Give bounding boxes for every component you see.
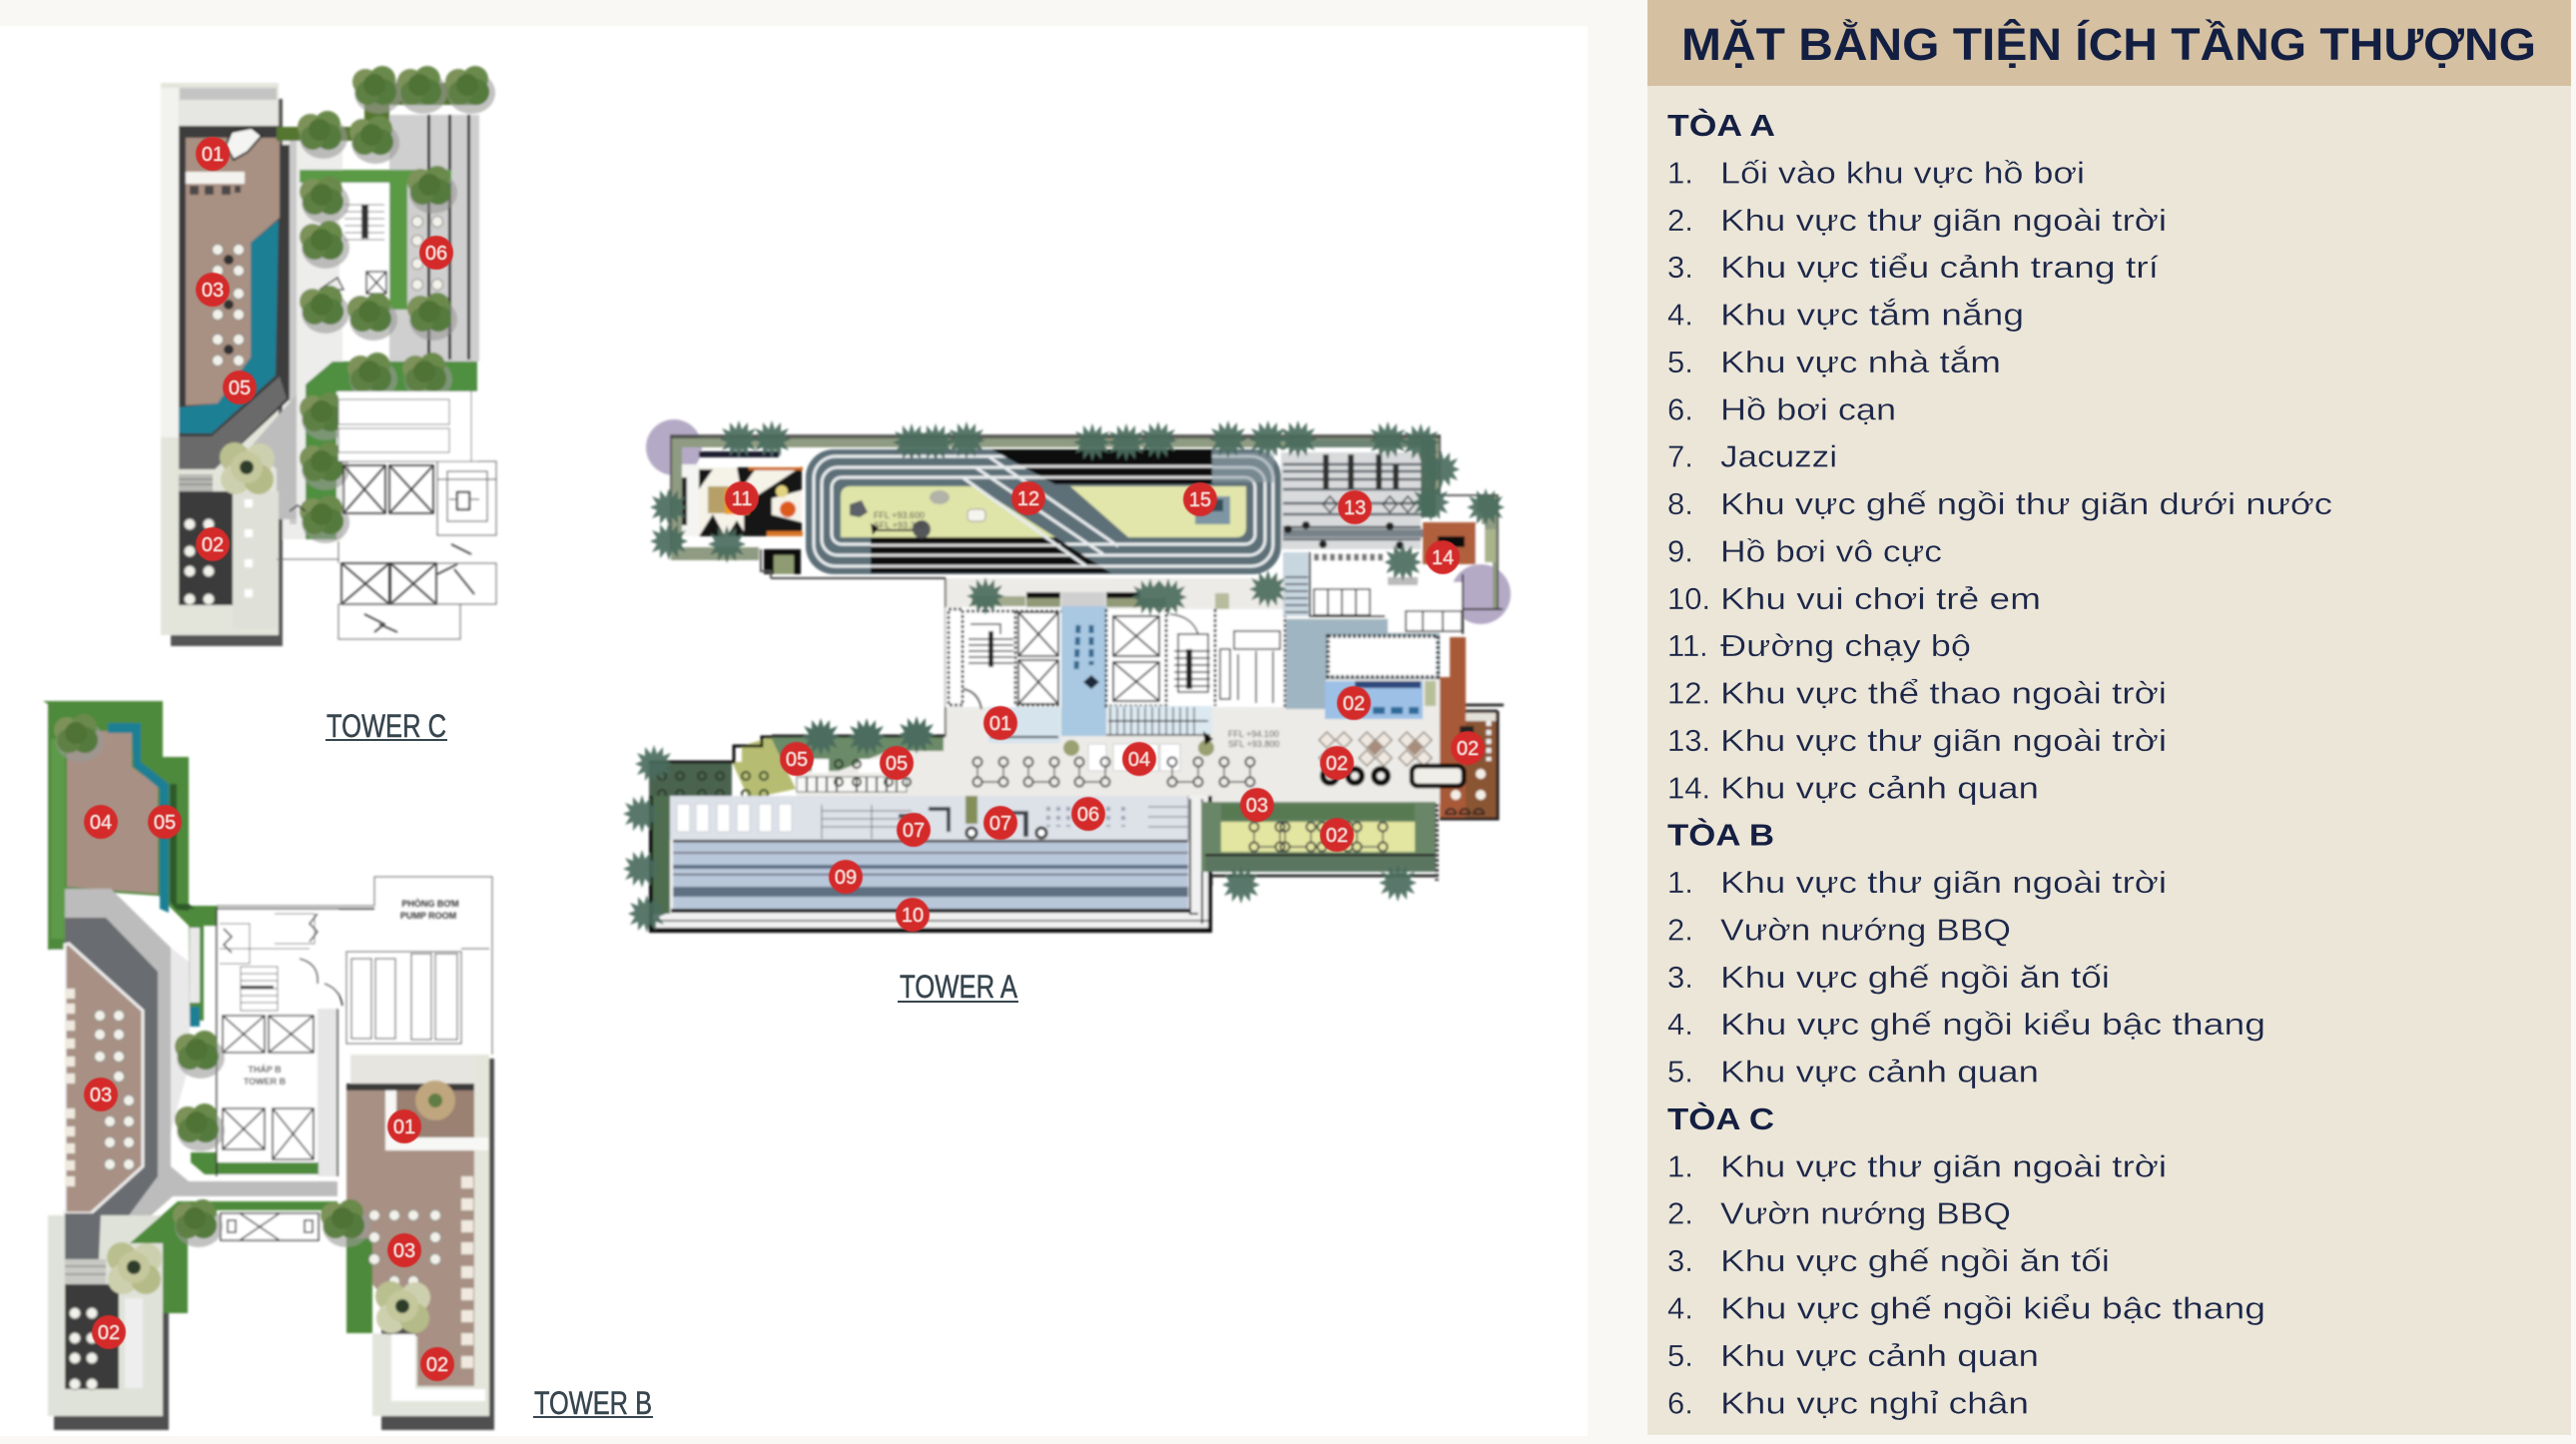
tower B octagon seating bbox=[65, 989, 134, 1186]
list: tower C: TÒA C bbox=[1667, 1100, 1774, 1136]
marker: A 03 bbox=[1240, 788, 1274, 822]
plan: tower B bbox=[43, 701, 494, 1430]
tower C base slab bbox=[161, 83, 279, 635]
tower C planting bbox=[220, 66, 495, 543]
list: tower C: Khu vực cảnh quan bbox=[1720, 1338, 2039, 1373]
tower A cafe tables bbox=[972, 729, 1279, 787]
marker: B 02 west: 02 bbox=[98, 1322, 120, 1344]
list: tower A: 6. bbox=[1667, 391, 1693, 426]
marker: A 11: 11 bbox=[732, 488, 752, 510]
marker: B 01: 01 bbox=[393, 1116, 415, 1138]
marker: A 12 bbox=[1011, 481, 1045, 515]
list: tower A: 14. bbox=[1667, 770, 1710, 805]
marker: C 02: 02 bbox=[202, 534, 224, 556]
tower B pump room bbox=[217, 877, 492, 1055]
tower B pump room: PUMP ROOM bbox=[400, 911, 456, 921]
list: tower A: 5. bbox=[1667, 345, 1693, 379]
list: tower C: 2. bbox=[1667, 1196, 1693, 1231]
title: MẶT BẰNG TIỆN ÍCH TẦNG THƯỢNG bbox=[1681, 19, 2536, 70]
marker: B 02 east: 02 bbox=[426, 1354, 448, 1376]
tower C seats east bbox=[411, 216, 443, 290]
list: tower C: 6. bbox=[1667, 1385, 1693, 1420]
label: tower B: TOWER B bbox=[534, 1385, 652, 1421]
list: tower B: Khu vực ghế ngồi ăn tối bbox=[1720, 960, 2110, 995]
tower A changing rooms bbox=[1310, 552, 1503, 634]
marker: A 02 dining: 02 bbox=[1326, 753, 1348, 775]
marker: B 05 bbox=[148, 805, 182, 839]
marker: B 03 east: 03 bbox=[393, 1240, 415, 1262]
marker: A 02 spa bbox=[1337, 686, 1371, 720]
marker: B 03 west bbox=[84, 1078, 118, 1111]
marker: B 04: 04 bbox=[90, 812, 112, 834]
marker: A 07 east bbox=[983, 806, 1017, 840]
marker: A 10: 10 bbox=[902, 905, 924, 927]
marker: A 07 east: 07 bbox=[989, 813, 1011, 835]
tower B octagon terrace bbox=[51, 889, 337, 1259]
list: tower C: Khu vực ghế ngồi kiểu bậc thang bbox=[1720, 1290, 2265, 1326]
tower A jogging track bbox=[806, 449, 1281, 574]
marker: A 09 bbox=[829, 860, 863, 894]
list: tower B: Khu vực ghế ngồi kiểu bậc thang bbox=[1720, 1007, 2265, 1042]
tower A jogging track: SFL +93.300 bbox=[874, 520, 925, 530]
list: tower B: Khu vực thư giãn ngoài trời bbox=[1720, 865, 2167, 900]
list: tower C: 1. bbox=[1667, 1148, 1693, 1183]
tower C shadow bbox=[171, 99, 283, 646]
tower A palms bbox=[623, 420, 1505, 933]
marker: A 04 bbox=[1122, 742, 1156, 776]
marker: A 05 west bbox=[780, 742, 814, 776]
tower B outer green bbox=[43, 701, 218, 950]
marker: A 07 west: 07 bbox=[903, 820, 925, 842]
label: tower C: TOWER C bbox=[326, 708, 446, 744]
marker: A 14 bbox=[1426, 540, 1460, 574]
marker: A 15 bbox=[1183, 482, 1217, 516]
list: tower C: Khu vực nghỉ chân bbox=[1720, 1385, 2029, 1420]
tower A north hedge bbox=[671, 435, 1498, 609]
marker: C 02 bbox=[196, 527, 230, 561]
tower C service core bbox=[277, 461, 496, 639]
list: tower A: 12. bbox=[1667, 676, 1710, 711]
marker: A 02 deck: 02 bbox=[1457, 738, 1479, 760]
marker: B 01 bbox=[387, 1109, 421, 1143]
tower A spa pool bbox=[1283, 552, 1440, 719]
tower C lounge seats bbox=[212, 244, 244, 365]
list: tower A: Khu vực thư giãn ngoài trời bbox=[1720, 723, 2167, 758]
list: tower B: 4. bbox=[1667, 1007, 1693, 1042]
list: tower A: 2. bbox=[1667, 203, 1693, 238]
tower A entrance and stair bbox=[988, 706, 1212, 771]
tower A south-east garden bbox=[1201, 802, 1438, 886]
marker: C 05 bbox=[223, 370, 257, 404]
list: tower A: 3. bbox=[1667, 250, 1693, 285]
tower C dining block bbox=[179, 474, 279, 629]
list: tower B: 3. bbox=[1667, 960, 1693, 995]
list: tower A: Đường chạy bộ bbox=[1720, 628, 1971, 663]
tower B south-east deck bbox=[346, 1055, 494, 1430]
tower B trees bbox=[107, 1031, 430, 1333]
list: tower A: 8. bbox=[1667, 486, 1693, 521]
marker: A 15: 15 bbox=[1189, 489, 1211, 511]
marker: C 03 bbox=[196, 273, 230, 307]
label: tower A: TOWER A bbox=[900, 969, 1018, 1005]
list: tower A: 9. bbox=[1667, 533, 1693, 568]
tower B pump room: PHÒNG BƠM bbox=[401, 898, 459, 909]
tower A pool bbox=[649, 796, 1212, 933]
list: tower A: 13. bbox=[1667, 723, 1710, 758]
list: tower A: Jacuzzi bbox=[1720, 439, 1837, 474]
marker: A 02 deck bbox=[1451, 731, 1485, 765]
list: tower A: Lối vào khu vực hồ bơi bbox=[1720, 155, 2085, 190]
marker: B 04 bbox=[84, 805, 118, 839]
marker: A 13 bbox=[1338, 490, 1372, 524]
marker: A 01: 01 bbox=[989, 713, 1011, 735]
tower B south-west block bbox=[48, 1213, 169, 1430]
marker: A 04: 04 bbox=[1128, 749, 1150, 771]
legend background bbox=[1647, 86, 2571, 1435]
marker: C 05: 05 bbox=[229, 377, 251, 399]
title bar bbox=[1647, 0, 2571, 86]
tower A green bay bbox=[761, 549, 946, 578]
tower C deck bbox=[179, 126, 290, 469]
marker: A 11 bbox=[725, 481, 759, 515]
tower B core: THÁP B bbox=[248, 1065, 282, 1075]
tower A north ledges bbox=[971, 592, 1229, 609]
marker: A 12: 12 bbox=[1017, 488, 1039, 510]
marker: A 13: 13 bbox=[1344, 497, 1366, 519]
list: tower B: TÒA B bbox=[1667, 817, 1774, 853]
list: tower B: 5. bbox=[1667, 1055, 1693, 1089]
list: tower A bbox=[1667, 107, 2332, 805]
marker: C 01 bbox=[196, 137, 230, 171]
tower A terracotta garden bbox=[1423, 522, 1496, 564]
marker: B 05: 05 bbox=[154, 812, 176, 834]
marker: B 02 east bbox=[420, 1347, 454, 1381]
marker: A 09: 09 bbox=[835, 867, 857, 889]
list: tower C: Vườn nướng BBQ bbox=[1720, 1196, 2011, 1231]
list: tower A: TÒA A bbox=[1667, 107, 1775, 143]
marker: C 06 bbox=[419, 236, 453, 270]
marker: A 02 garden: 02 bbox=[1326, 825, 1348, 847]
marker: C 03: 03 bbox=[202, 280, 224, 302]
list: tower B bbox=[1667, 817, 2265, 1089]
list: tower A: Khu vực tiểu cảnh trang trí bbox=[1720, 250, 2159, 285]
marker: A 02 garden bbox=[1320, 818, 1354, 852]
marker: A 02 dining bbox=[1320, 746, 1354, 780]
marker: A 02 spa: 02 bbox=[1343, 693, 1365, 715]
marker: A 14: 14 bbox=[1432, 547, 1454, 569]
plan: tower C bbox=[161, 66, 496, 646]
list: tower C: Khu vực thư giãn ngoài trời bbox=[1720, 1148, 2167, 1183]
marker: A 01 bbox=[983, 706, 1017, 740]
tower A purple trees bbox=[646, 419, 1511, 624]
panel: legend bbox=[1647, 0, 2571, 1435]
list: tower C: 4. bbox=[1667, 1290, 1693, 1326]
list: tower A: 10. bbox=[1667, 581, 1710, 616]
list: tower B: 1. bbox=[1667, 865, 1693, 900]
tower B green bridge bbox=[130, 1201, 337, 1313]
list: tower B: 2. bbox=[1667, 913, 1693, 947]
tower A playground bbox=[682, 451, 803, 536]
marker: A 07 west bbox=[897, 813, 931, 847]
tower B core bbox=[189, 909, 374, 1176]
tower A north lounge bbox=[1212, 452, 1423, 549]
tower A dining terrace bbox=[1319, 732, 1464, 786]
list: tower C: Khu vực ghế ngồi ăn tối bbox=[1720, 1243, 2110, 1278]
marker: A 03: 03 bbox=[1246, 795, 1268, 817]
list: tower A: Khu vực thư giãn ngoài trời bbox=[1720, 203, 2167, 238]
tower A BBQ wood deck bbox=[1440, 637, 1504, 819]
tower A cafe tables: FFL +94.100 bbox=[1228, 729, 1279, 739]
marker: B 02 west bbox=[92, 1315, 126, 1349]
tower C pavements bbox=[253, 115, 479, 539]
plan: tower A bbox=[623, 419, 1511, 933]
marker: A 05 east bbox=[880, 746, 914, 780]
list: tower A: Khu vui chơi trẻ em bbox=[1720, 581, 2041, 616]
list: tower C: 3. bbox=[1667, 1243, 1693, 1278]
list: tower A: Khu vực tắm nắng bbox=[1720, 298, 2024, 332]
tower A cafe tables: SFL +93.800 bbox=[1228, 739, 1279, 749]
list: tower A: Khu vực ghế ngồi thư giãn dưới nước bbox=[1720, 486, 2332, 521]
floor plan sheet bbox=[0, 26, 1588, 1436]
list: tower C bbox=[1667, 1100, 2265, 1420]
list: tower A: 1. bbox=[1667, 155, 1693, 190]
list: tower A: Hồ bơi cạn bbox=[1720, 391, 1896, 426]
marker: A 05 east: 05 bbox=[886, 753, 908, 775]
marker: C 06: 06 bbox=[425, 243, 447, 265]
marker: C 01: 01 bbox=[202, 144, 224, 166]
list: tower A: 7. bbox=[1667, 439, 1693, 474]
marker: A 06 bbox=[1071, 797, 1105, 831]
tower B core: TOWER B bbox=[244, 1077, 287, 1086]
list: tower B: Khu vực cảnh quan bbox=[1720, 1055, 2039, 1089]
tower A west terrace bbox=[649, 716, 946, 799]
list: tower A: Hồ bơi vô cực bbox=[1720, 533, 1942, 568]
list: tower A: Khu vực thể thao ngoài trời bbox=[1720, 676, 2167, 711]
marker: A 06: 06 bbox=[1077, 804, 1099, 826]
tower A jogging track: FFL +93.600 bbox=[874, 510, 925, 520]
marker: B 03 east bbox=[387, 1233, 421, 1267]
list: tower C: 5. bbox=[1667, 1338, 1693, 1373]
tower A central floor bbox=[797, 578, 1440, 804]
marker: A 05 west: 05 bbox=[786, 749, 808, 771]
list: tower A: Khu vực cảnh quan bbox=[1720, 770, 2039, 805]
list: tower B: Vườn nướng BBQ bbox=[1720, 913, 2011, 947]
marker: B 03 west: 03 bbox=[90, 1084, 112, 1106]
tower A lift lobby bbox=[946, 606, 1285, 736]
list: tower A: 4. bbox=[1667, 298, 1693, 332]
marker: A 10 bbox=[896, 898, 930, 932]
list: tower A: 11. bbox=[1667, 628, 1708, 663]
tower B north deck bbox=[51, 714, 199, 939]
list: tower A: Khu vực nhà tắm bbox=[1720, 345, 2001, 379]
tower C pool tanks bbox=[338, 391, 477, 461]
